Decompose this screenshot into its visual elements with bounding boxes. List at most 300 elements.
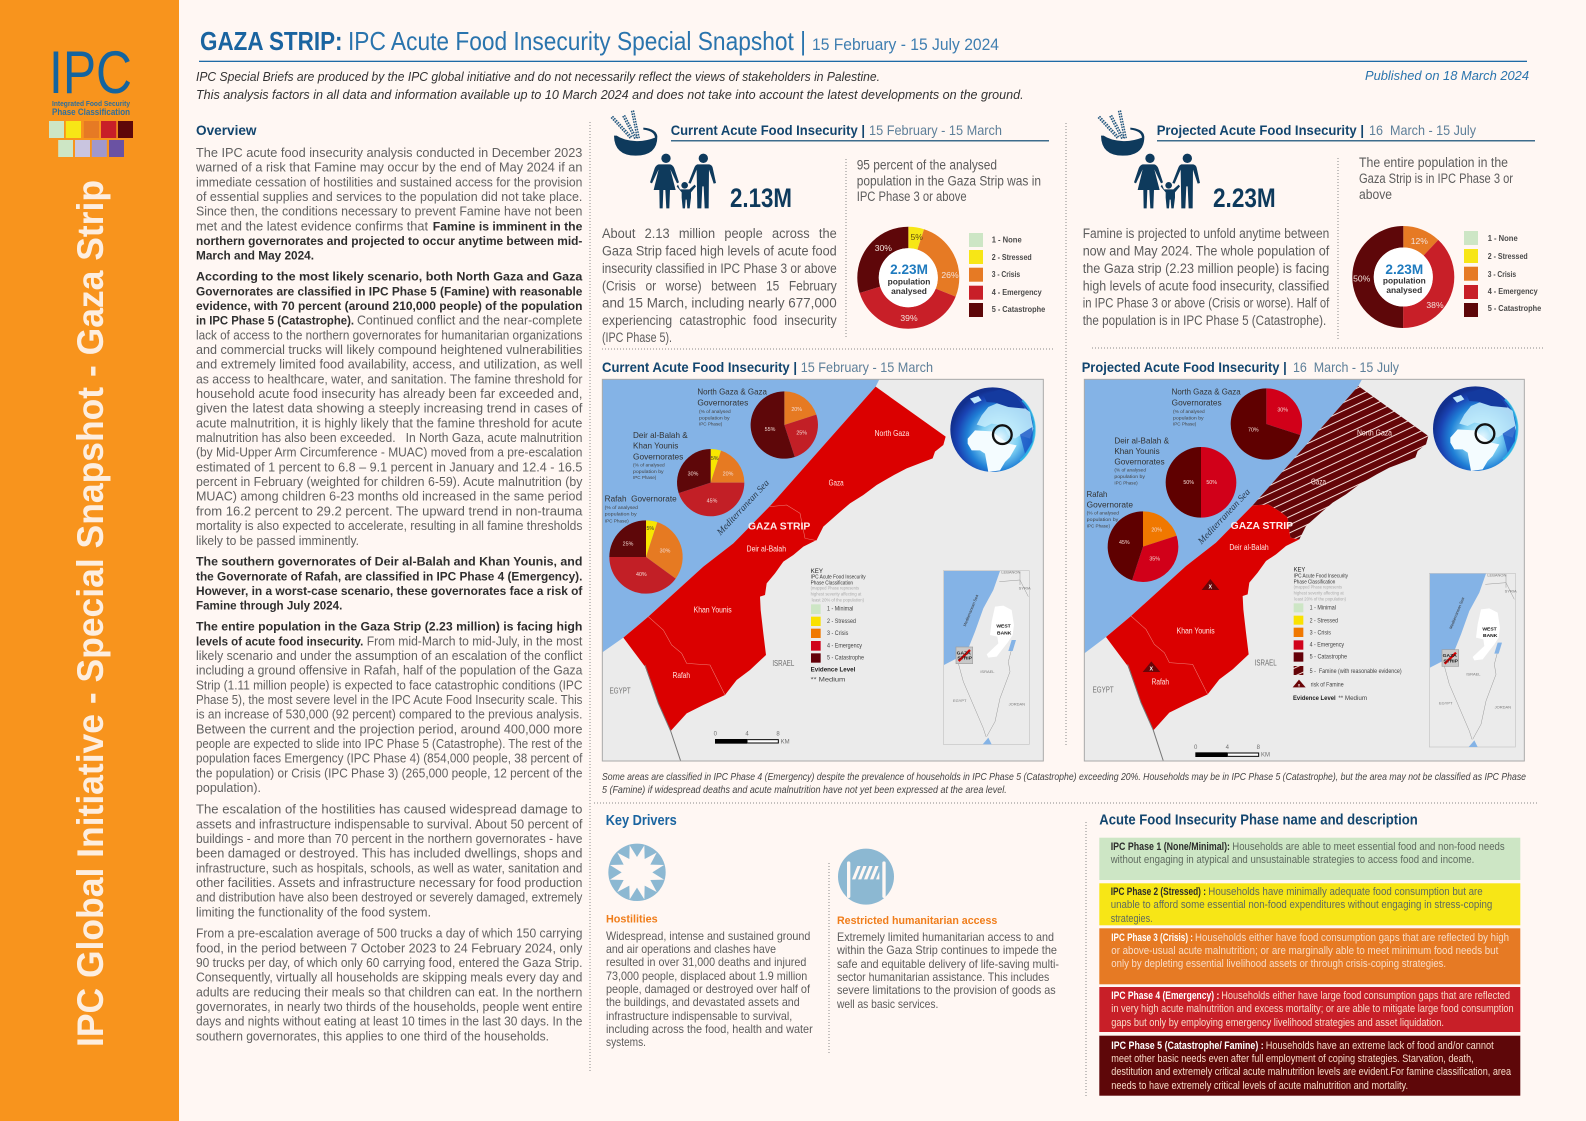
- map key: (mapped Phase represents: [1294, 585, 1342, 590]
- overview paragraph 1: March and May 2024.: [196, 249, 314, 263]
- overview paragraph 3: [196, 555, 583, 613]
- key drivers heading: Key Drivers: [606, 813, 677, 829]
- sea: [1084, 379, 1362, 653]
- overview paragraph 5: assets and infrastructure indispensable to survival. About 50 percent of: [196, 817, 583, 831]
- title: IPC Acute Food Insecurity Special Snapshot |: [348, 26, 806, 56]
- inset locator map: ISRAEL: [980, 669, 995, 674]
- big number: 2.13M: 2.13M: [730, 183, 792, 213]
- overview paragraph 4: Phase 5), the most severe level in the IPC Acute Food Insecurity scale. This: [196, 693, 582, 707]
- risk of famine markers: X: [1209, 584, 1213, 590]
- overview paragraph 2: from 16.2 percent to 29.2 percent. The upward trend in non-trauma: [196, 504, 582, 518]
- gaza strip phase area: [623, 387, 946, 731]
- summary paragraph: projected: high levels of acute food insecurity, classified: [1083, 278, 1329, 293]
- icon: globe locator: [950, 387, 1035, 472]
- pie: deir al-balah and khan younis: IPC Phase): [633, 475, 657, 481]
- callout text: projected: Gaza Strip is in IPC Phase 3 or: [1359, 171, 1513, 186]
- overview paragraph 5: [196, 803, 583, 920]
- sidebar vertical title: IPC Global Initiative - Special Snapshot - Gaza Strip: [70, 180, 111, 1047]
- pie: deir al-balah and khan younis: Governorates: [1114, 457, 1165, 467]
- overview paragraph 1: immediate cessation of hostilities and sustained access for the provision: [196, 175, 582, 189]
- map key: highest severity affecting at: [1294, 591, 1344, 596]
- pie: north gaza and gaza: Governorates: [697, 398, 749, 408]
- legend: current: 4 - Emergency: [992, 287, 1042, 297]
- map labels: EGYPT: [1093, 686, 1114, 695]
- phase 4 row: in very high acute malnutrition and excess mortality; or are able to mitigate large food consumption: [1111, 1003, 1514, 1015]
- pie: rafah: IPC Phase): [1087, 523, 1110, 529]
- icon: family: [650, 154, 716, 208]
- pie: rafah: (% of analysed: [1087, 511, 1119, 517]
- map key: Evidence Level: [811, 667, 856, 674]
- phase 3 row: [1099, 928, 1520, 984]
- summary paragraph: projected: Famine is projected to unfold anytime between: [1083, 226, 1329, 241]
- summary paragraph: current: Gaza Strip faced high levels of acute food: [602, 244, 837, 259]
- pie: rafah: 45%: [1119, 540, 1130, 546]
- map key: least 20% of the population): [812, 597, 865, 602]
- inset locator map: STRIP: [1443, 658, 1459, 664]
- summary paragraph: current: (IPC Phase 5).: [602, 330, 672, 345]
- pie: deir al-balah and khan younis: (% of analysed: [1114, 468, 1146, 474]
- IPC logo: Phase Classification: [52, 107, 130, 117]
- callout text: current: population in the Gaza Strip was in: [857, 174, 1041, 188]
- phase 5 row: meet other basic needs even after full employment of coping strategies. Starvation, death,: [1111, 1053, 1474, 1065]
- donut chart: projected phases: analysed: [1386, 285, 1422, 295]
- pie: north gaza and gaza: IPC Phase): [1173, 421, 1197, 427]
- inset locator map: [1429, 572, 1517, 747]
- icon: wheat bowl: [1099, 110, 1144, 156]
- pie: deir al-balah and khan younis: Governorates: [633, 452, 684, 462]
- overview paragraph 4: population faces Emergency (IPC Phase 4) (854,000 people, 38 percent of: [196, 752, 583, 766]
- section heading: current: Current Acute Food Insecurity |: [671, 123, 865, 138]
- legend: projected: 4 - Emergency: [1488, 286, 1538, 296]
- map labels: Gaza: [829, 478, 844, 488]
- pie: rafah: (% of analysed: [605, 505, 638, 511]
- icon: globe locator: [1433, 386, 1518, 471]
- overview paragraph 2: estimated of 1 percent to 6.8 – 9.1 percent in January and 12.4 - 16.5: [196, 460, 582, 474]
- inset locator map: [943, 570, 1031, 744]
- restricted access driver: [836, 915, 1059, 1011]
- map key: [811, 568, 866, 683]
- pie: deir al-balah and khan younis: 20%: [723, 471, 734, 477]
- publication date: Published on 18 March 2024: [1365, 68, 1529, 83]
- pie: rafah: population by: [605, 512, 637, 518]
- legend: current: 3 - Crisis: [992, 269, 1020, 279]
- overview paragraph 2: likely to be passed imminently.: [196, 534, 359, 548]
- map key: 5 - Famine (with reasonable evidence): [1310, 669, 1402, 675]
- map key: KEY: [811, 568, 824, 575]
- pie: rafah: 5%: [646, 526, 654, 532]
- pie: rafah: Governorate: [1087, 500, 1133, 510]
- icon: wheat bowl: [612, 110, 657, 156]
- phase table heading: Acute Food Insecurity Phase name and description: [1099, 812, 1418, 828]
- pie: deir al-balah and khan younis: 45%: [707, 498, 718, 504]
- overview paragraph 4: Between the current and the projection period, around 400,000 more: [196, 722, 582, 736]
- pie: deir al-balah and khan younis: 50%: [1206, 480, 1217, 486]
- pie: deir al-balah and khan younis: [633, 430, 744, 516]
- donut chart: projected phases: 50%: [1353, 274, 1371, 284]
- overview paragraph 4: including a ground offensive in Rafah, half of the population of the Gaza: [196, 664, 582, 678]
- overview paragraph 1: Famine is imminent in the: [433, 219, 583, 233]
- restricted access driver: severe limitations to the provision of goods as: [837, 984, 1056, 997]
- subtitle disclaimer: IPC Special Briefs are produced by the IPC global initiative and do not necessarily reflect the views of stakeholders in Palestine.: [196, 69, 880, 84]
- overview paragraph 1: of essential supplies and services to the population did not take place.: [196, 190, 582, 204]
- restricted access driver: well as basic services.: [836, 998, 938, 1011]
- hostilities driver: Hostilities: [606, 914, 658, 926]
- map labels: Gaza: [1311, 477, 1326, 487]
- scale bar: [1194, 745, 1270, 759]
- map key: ** Medium: [1338, 696, 1367, 702]
- overview paragraph 2: in IPC Phase 5 (Catastrophe).: [196, 314, 354, 328]
- summary paragraph: projected: [1083, 226, 1330, 328]
- inset locator map: LEBANON: [1001, 570, 1020, 575]
- inset locator map: ISRAEL: [1466, 672, 1481, 677]
- map key: X: [1298, 683, 1301, 687]
- summary paragraph: current: experiencing catastrophic food insecurity: [602, 313, 837, 328]
- legend: current: 1 - None: [992, 234, 1022, 244]
- overview paragraph 2: as access to healthcare, water, and sanitation. The famine threshold for: [196, 372, 582, 386]
- map key: [1293, 567, 1402, 702]
- callout text: projected: above: [1359, 187, 1392, 202]
- summary paragraph: projected: the population is in IPC Phase 5 (Catastrophe).: [1083, 313, 1326, 328]
- donut chart: current phases: [868, 232, 959, 323]
- pie: deir al-balah and khan younis: population by: [633, 469, 664, 475]
- donut chart: current phases: 39%: [900, 313, 918, 323]
- restricted access driver: safe and equitable delivery of life-saving multi-: [837, 958, 1059, 971]
- title: [199, 26, 1527, 62]
- pie: rafah: 30%: [660, 548, 671, 554]
- overview paragraph 6: From a pre-escalation average of 500 trucks a day of which 150 carrying: [196, 927, 582, 941]
- section heading: current: 15 February - 15 March: [869, 123, 1002, 138]
- pie: rafah: [605, 493, 683, 594]
- map labels: Deir al-Balah: [1229, 542, 1269, 552]
- panel: key drivers: [606, 813, 1059, 1049]
- map key: 5 - Catastrophe: [1310, 655, 1348, 661]
- overview paragraph 2: household acute food insecurity has already been far exceeded and,: [196, 387, 582, 401]
- overview paragraph 4: is an increase of 530,000 (92 percent) compared to the previous analysis.: [196, 708, 582, 722]
- inset locator map: WEST: [996, 624, 1011, 630]
- overview paragraph 5: infrastructure, such as hospitals, schools, as well as water, sanitation and: [196, 861, 582, 875]
- map labels: ISRAEL: [1255, 658, 1277, 667]
- pie: deir al-balah and khan younis: 30%: [688, 471, 699, 477]
- pie: deir al-balah and khan younis: 5%: [711, 456, 719, 462]
- summary paragraph: current: and 15 March, including nearly 677,000: [602, 296, 837, 311]
- map key: 4 - Emergency: [827, 644, 862, 650]
- map labels: North Gaza: [875, 428, 910, 438]
- pie: deir al-balah and khan younis: 50%: [1183, 480, 1194, 486]
- panel: current acute food insecurity summary: [602, 110, 1049, 345]
- icon: hostilities starburst: [608, 844, 666, 901]
- map labels: EGYPT: [610, 686, 631, 695]
- map heading: current: Current Acute Food Insecurity |: [602, 360, 797, 375]
- scale bar: 0: [714, 732, 718, 738]
- overview paragraph 4: The entire population in the Gaza Strip (2.23 million) is facing high: [196, 620, 582, 634]
- pie: north gaza and gaza: Governorates: [1172, 397, 1222, 407]
- overview paragraph 2: and commercial trucks will likely compound heightened vulnerabilities: [196, 343, 582, 357]
- overview paragraph 1: [195, 146, 583, 263]
- map key: 3 - Crisis: [1310, 630, 1331, 636]
- scale bar: 4: [745, 732, 749, 738]
- overview paragraph 2: and extremely limited food availability, access, and utilization, as well: [196, 358, 582, 372]
- hostilities driver: Widespread, intense and sustained ground: [606, 930, 810, 943]
- map key: 3 - Crisis: [827, 631, 848, 637]
- donut chart: projected phases: [1353, 236, 1444, 317]
- inset locator map: Mediterranean Sea: [1448, 596, 1466, 630]
- scale bar: 8: [1257, 745, 1261, 751]
- donut chart: current phases: analysed: [891, 286, 927, 296]
- scale bar: 0: [1194, 745, 1198, 751]
- donut chart: projected phases: population: [1383, 276, 1426, 286]
- section heading: projected: Projected Acute Food Insecurity |: [1157, 123, 1364, 138]
- overview paragraph 1: Since then, the conditions necessary to prevent Famine have not been: [196, 205, 582, 219]
- legend: current: 5 - Catastrophe: [992, 304, 1045, 314]
- overview paragraph 2: acute malnutrition, it is highly likely that the famine threshold for acute: [196, 416, 582, 430]
- overview paragraph 3: The southern governorates of Deir al-Balah and Khan Younis, and: [196, 555, 582, 569]
- map labels: ISRAEL: [772, 659, 795, 668]
- overview paragraph 6: 90 trucks per day, of which only 60 carrying food, entered the Gaza Strip.: [196, 956, 582, 970]
- pie: rafah: Rafah Governorate: [605, 493, 677, 503]
- map labels: Khan Younis: [694, 604, 732, 614]
- overview paragraph 4: [196, 620, 583, 795]
- overview paragraph 5: been damaged or destroyed. This has included dwellings, shops and: [196, 847, 582, 861]
- pie: rafah: IPC Phase): [605, 518, 629, 524]
- overview paragraph 2: mortality is also expected to accelerate, resulting in all famine thresholds: [196, 519, 582, 533]
- subtitle disclaimer: [196, 69, 1024, 102]
- title: GAZA STRIP:: [200, 26, 342, 56]
- map labels: [610, 428, 910, 695]
- overview paragraph 2: [196, 270, 583, 548]
- summary paragraph: current: (Crisis or worse) between 15 February: [602, 278, 837, 293]
- overview paragraph 2: Governorates are classified in IPC Phase 5 (Famine) with reasonable: [196, 284, 583, 298]
- map labels: Mediterranean Sea: [715, 478, 772, 538]
- summary paragraph: current: About 2.13 million people across the: [602, 226, 837, 241]
- restricted access driver: within the Gaza Strip continues to impede the: [836, 944, 1057, 957]
- phase 5 row: [1099, 1036, 1520, 1096]
- map: projected: [1084, 379, 1524, 761]
- map heading: current: [602, 360, 933, 375]
- map key: IPC Acute Food Insecurity: [811, 574, 866, 580]
- map labels: Deir al-Balah: [747, 543, 786, 553]
- map key: Phase Classification: [1294, 579, 1335, 585]
- pie: rafah: [1087, 489, 1178, 582]
- inset locator map: BANK: [997, 630, 1012, 636]
- pie: rafah: 20%: [1151, 527, 1162, 533]
- legend: projected: 2 - Stressed: [1488, 251, 1528, 261]
- hostilities driver: 73,000 people, displaced about 1.9 million: [606, 970, 807, 983]
- phase 2 row: [1099, 883, 1520, 925]
- overview paragraph 4: Strip (1.11 million people) is expected to face catastrophic conditions (IPC: [196, 678, 582, 692]
- restricted access driver: Restricted humanitarian access: [837, 915, 997, 927]
- map key: Phase Classification: [811, 580, 853, 586]
- phase 1 row: [1099, 838, 1520, 880]
- phase 5 row: Households have an extreme lack of food and/or cannot: [1266, 1040, 1494, 1052]
- map footnote: [602, 772, 1526, 796]
- hostilities driver: [606, 914, 813, 1049]
- famine hatched northern area: [1253, 386, 1428, 539]
- legend: current: [969, 233, 1045, 317]
- phase 2 row: Households have minimally adequate food consumption but are: [1208, 886, 1483, 898]
- section heading: current: [671, 123, 1049, 141]
- pie: rafah: population by: [1087, 517, 1119, 523]
- overview paragraph 2: MUAC) among children 6-23 months old increased in the same period: [196, 490, 582, 504]
- hostilities driver: and air operations and clashes have: [606, 943, 776, 956]
- map key: IPC Acute Food Insecurity: [1294, 574, 1348, 580]
- phase 5 row: IPC Phase 5 (Catastrophe/ Famine) :: [1111, 1040, 1264, 1052]
- overview paragraph 6: Consequently, virtually all households are skipping meals every day and: [196, 971, 582, 985]
- pie: rafah: 35%: [1149, 556, 1160, 562]
- overview paragraph 1: northern governorates and projected to occur anytime between mid-: [196, 234, 582, 248]
- inset locator map: SYRIA: [1505, 588, 1517, 593]
- pie: north gaza and gaza: population by: [1173, 415, 1204, 421]
- donut chart: projected phases: 2.23M: [1385, 262, 1423, 277]
- map key: (mapped Phase represents: [811, 586, 859, 591]
- map key: 5 - Catastrophe: [827, 656, 865, 662]
- IPC logo: Integrated Food Security: [52, 99, 131, 108]
- pie: deir al-balah and khan younis: Khan Younis: [1114, 446, 1160, 456]
- map labels: North Gaza: [1357, 427, 1392, 437]
- phase 1 row: Households are able to meet essential food and non-food needs: [1232, 841, 1505, 853]
- inset locator map: SYRIA: [1019, 586, 1031, 591]
- section heading: projected: 16 March - 15 July: [1369, 123, 1476, 138]
- overview paragraph 3: the Governorate of Rafah, are classified in IPC Phase 4 (Emergency).: [196, 569, 582, 583]
- overview paragraph 4: From mid-March to mid-July, in the most: [367, 634, 583, 648]
- map footnote: 5 (Famine) if widespread deaths and acute malnutrition have not yet been expressed at the area level.: [602, 785, 1007, 796]
- summary paragraph: projected: now and May 2024. The whole population of: [1083, 244, 1330, 259]
- risk of famine markers: X: [1150, 667, 1154, 673]
- phase 4 row: IPC Phase 4 (Emergency) :: [1111, 990, 1219, 1002]
- phase 1 row: without engaging in atypical and unsustainable strategies to access food and income.: [1110, 854, 1474, 866]
- map labels: Mediterranean Sea: [1196, 487, 1253, 547]
- restricted access driver: sector humanitarian assistance. This includes: [837, 971, 1049, 984]
- inset locator map: STRIP: [957, 656, 973, 662]
- overview paragraph 2: (by Mid-Upper Arm Circumference - MUAC) moved from a pre-escalation: [196, 446, 582, 460]
- overview paragraph 5: buildings - and more than 70 percent in the northern governorates - have: [196, 832, 582, 846]
- map labels: GAZA STRIP: [748, 522, 810, 533]
- map: current: [602, 379, 1043, 761]
- pie: rafah: 25%: [623, 541, 634, 547]
- phase 3 row: IPC Phase 3 (Crisis) :: [1111, 932, 1193, 944]
- scale bar: [714, 732, 790, 745]
- phase 4 row: [1099, 987, 1520, 1032]
- overview paragraph 2: According to the most likely scenario, both North Gaza and Gaza: [196, 270, 582, 284]
- phase 5 row: destitution and extremely critical acute malnutrition levels are evident.For famine classification, area: [1111, 1066, 1511, 1078]
- inset locator map: GAZA: [957, 650, 971, 656]
- title: 15 February - 15 July 2024: [812, 35, 999, 54]
- icon: road barrier: [838, 849, 894, 905]
- phase 3 row: or above-usual acute malnutrition; or are marginally able to meet minimum food needs but: [1111, 945, 1498, 957]
- overview paragraph 4: population).: [196, 781, 261, 795]
- map key: 1 - Minimal: [827, 606, 853, 612]
- overview paragraph 6: governorates, in nearly two thirds of the households, people went entire: [196, 1000, 582, 1014]
- pie: north gaza and gaza: North Gaza & Gaza: [1172, 387, 1241, 397]
- scale bar: KM: [1261, 753, 1270, 759]
- pie: deir al-balah and khan younis: IPC Phase): [1114, 480, 1138, 486]
- pie: deir al-balah and khan younis: Deir al-Balah &: [633, 430, 688, 440]
- map labels: Khan Younis: [1177, 626, 1215, 636]
- IPC logo: IPC: [49, 39, 132, 106]
- donut chart: current phases: 30%: [875, 243, 892, 253]
- pie: north gaza and gaza: population by: [699, 415, 730, 421]
- donut chart: current phases: 5%: [910, 232, 923, 242]
- donut chart: current phases: 2.23M: [890, 262, 928, 277]
- hostilities driver: people, damaged or destroyed over half of: [606, 983, 811, 996]
- panel: projected acute food insecurity summary: [1083, 110, 1541, 328]
- map heading: projected: [1082, 360, 1399, 375]
- callout text: projected: The entire population in the: [1359, 155, 1508, 170]
- inset locator map: BANK: [1483, 633, 1498, 639]
- phase 2 row: IPC Phase 2 (Stressed) :: [1111, 886, 1206, 898]
- scale bar: KM: [781, 739, 790, 745]
- callout text: projected: [1359, 155, 1513, 202]
- subtitle disclaimer: This analysis factors in all data and information available up to 10 March 2024 and does not take into account the latest developments on the ground.: [196, 87, 1024, 102]
- overview paragraph 5: limiting the functionality of the food system.: [196, 906, 431, 920]
- pie: deir al-balah and khan younis: (% of analysed: [633, 463, 665, 469]
- legend: projected: 5 - Catastrophe: [1488, 303, 1541, 313]
- donut chart: current phases: population: [888, 276, 930, 286]
- pie: north gaza and gaza: [697, 387, 818, 459]
- summary paragraph: projected: in IPC Phase 3 or above (Crisis or worse). Half of: [1083, 296, 1330, 311]
- legend: projected: [1464, 231, 1541, 317]
- icon: family: [1134, 154, 1200, 208]
- donut chart: projected phases: 38%: [1426, 300, 1444, 310]
- sea: [602, 379, 879, 652]
- overview paragraph 6: [196, 927, 583, 1043]
- overview paragraph 2: malnutrition has also been exceeded. In North Gaza, acute malnutrition: [196, 431, 582, 445]
- overview paragraph 6: adults are reducing their meals so that children can eat. In the northern: [196, 985, 582, 999]
- map key: 2 - Stressed: [827, 619, 856, 625]
- map key: risk of Famine: [1311, 683, 1344, 689]
- map labels: [1093, 427, 1392, 695]
- phase 5 row: needs to have extremely critical levels of acute malnutrition and mortality.: [1111, 1080, 1408, 1092]
- pie: deir al-balah and khan younis: Khan Younis: [633, 441, 679, 451]
- map key: least 20% of the population): [1294, 597, 1347, 602]
- phase 1 row: IPC Phase 1 (None/Minimal):: [1111, 841, 1230, 853]
- gaza strip southern phase area: [1106, 504, 1299, 730]
- section heading: projected: [1157, 123, 1535, 141]
- restricted access driver: Extremely limited humanitarian access to and: [837, 931, 1054, 944]
- phase 2 row: unable to afford some essential non-food expenditures without engaging in stress-coping: [1111, 899, 1492, 911]
- phase 2 row: strategies.: [1111, 913, 1153, 925]
- map key: 2 - Stressed: [1310, 619, 1338, 625]
- scale bar: 8: [776, 732, 780, 738]
- map key: Evidence Level: [1293, 695, 1336, 702]
- map key: 1 - Minimal: [1310, 606, 1336, 612]
- legend: projected: 1 - None: [1488, 233, 1518, 243]
- pie: north gaza and gaza: 70%: [1248, 427, 1259, 433]
- overview paragraph 4: the population) or Crisis (IPC Phase 3) (265,000 people, 12 percent of the: [196, 766, 582, 780]
- phase 4 row: Households either have large food consumption gaps that are reflected: [1221, 990, 1510, 1002]
- overview paragraph 1: warned of a risk that Famine may occur by the end of May 2024 if an: [195, 161, 582, 175]
- pie: rafah: 40%: [636, 572, 647, 578]
- hostilities driver: systems.: [606, 1036, 646, 1049]
- summary paragraph: projected: the Gaza strip (2.23 million people) is facing: [1083, 261, 1329, 276]
- inset locator map: JORDAN: [1009, 702, 1025, 707]
- map key: KEY: [1294, 567, 1306, 574]
- overview paragraph 5: and distribution have also been destroyed or severely damaged, extremely: [196, 891, 583, 905]
- IPC logo: [49, 39, 133, 157]
- pie: north gaza and gaza: (% of analysed: [699, 409, 731, 415]
- overview paragraph 4: people are expected to slide into IPC Phase 5 (Catastrophe). The rest of the: [196, 737, 582, 751]
- overview paragraph 3: Famine through July 2024.: [196, 599, 342, 613]
- map labels: Rafah: [673, 670, 690, 680]
- map heading: projected: Projected Acute Food Insecurity |: [1082, 360, 1287, 375]
- map key: ** Medium: [811, 676, 846, 683]
- panel: phase descriptions: [1099, 812, 1520, 1096]
- panel: orange sidebar: [0, 0, 179, 1121]
- donut chart: current phases: 26%: [941, 270, 959, 280]
- inset locator map: Mediterranean Sea: [962, 593, 980, 627]
- scale bar: 4: [1226, 745, 1230, 751]
- pie: deir al-balah and khan younis: Deir al-Balah &: [1114, 435, 1169, 445]
- overview paragraph 6: southern governorates, this applies to one third of the households.: [196, 1029, 549, 1043]
